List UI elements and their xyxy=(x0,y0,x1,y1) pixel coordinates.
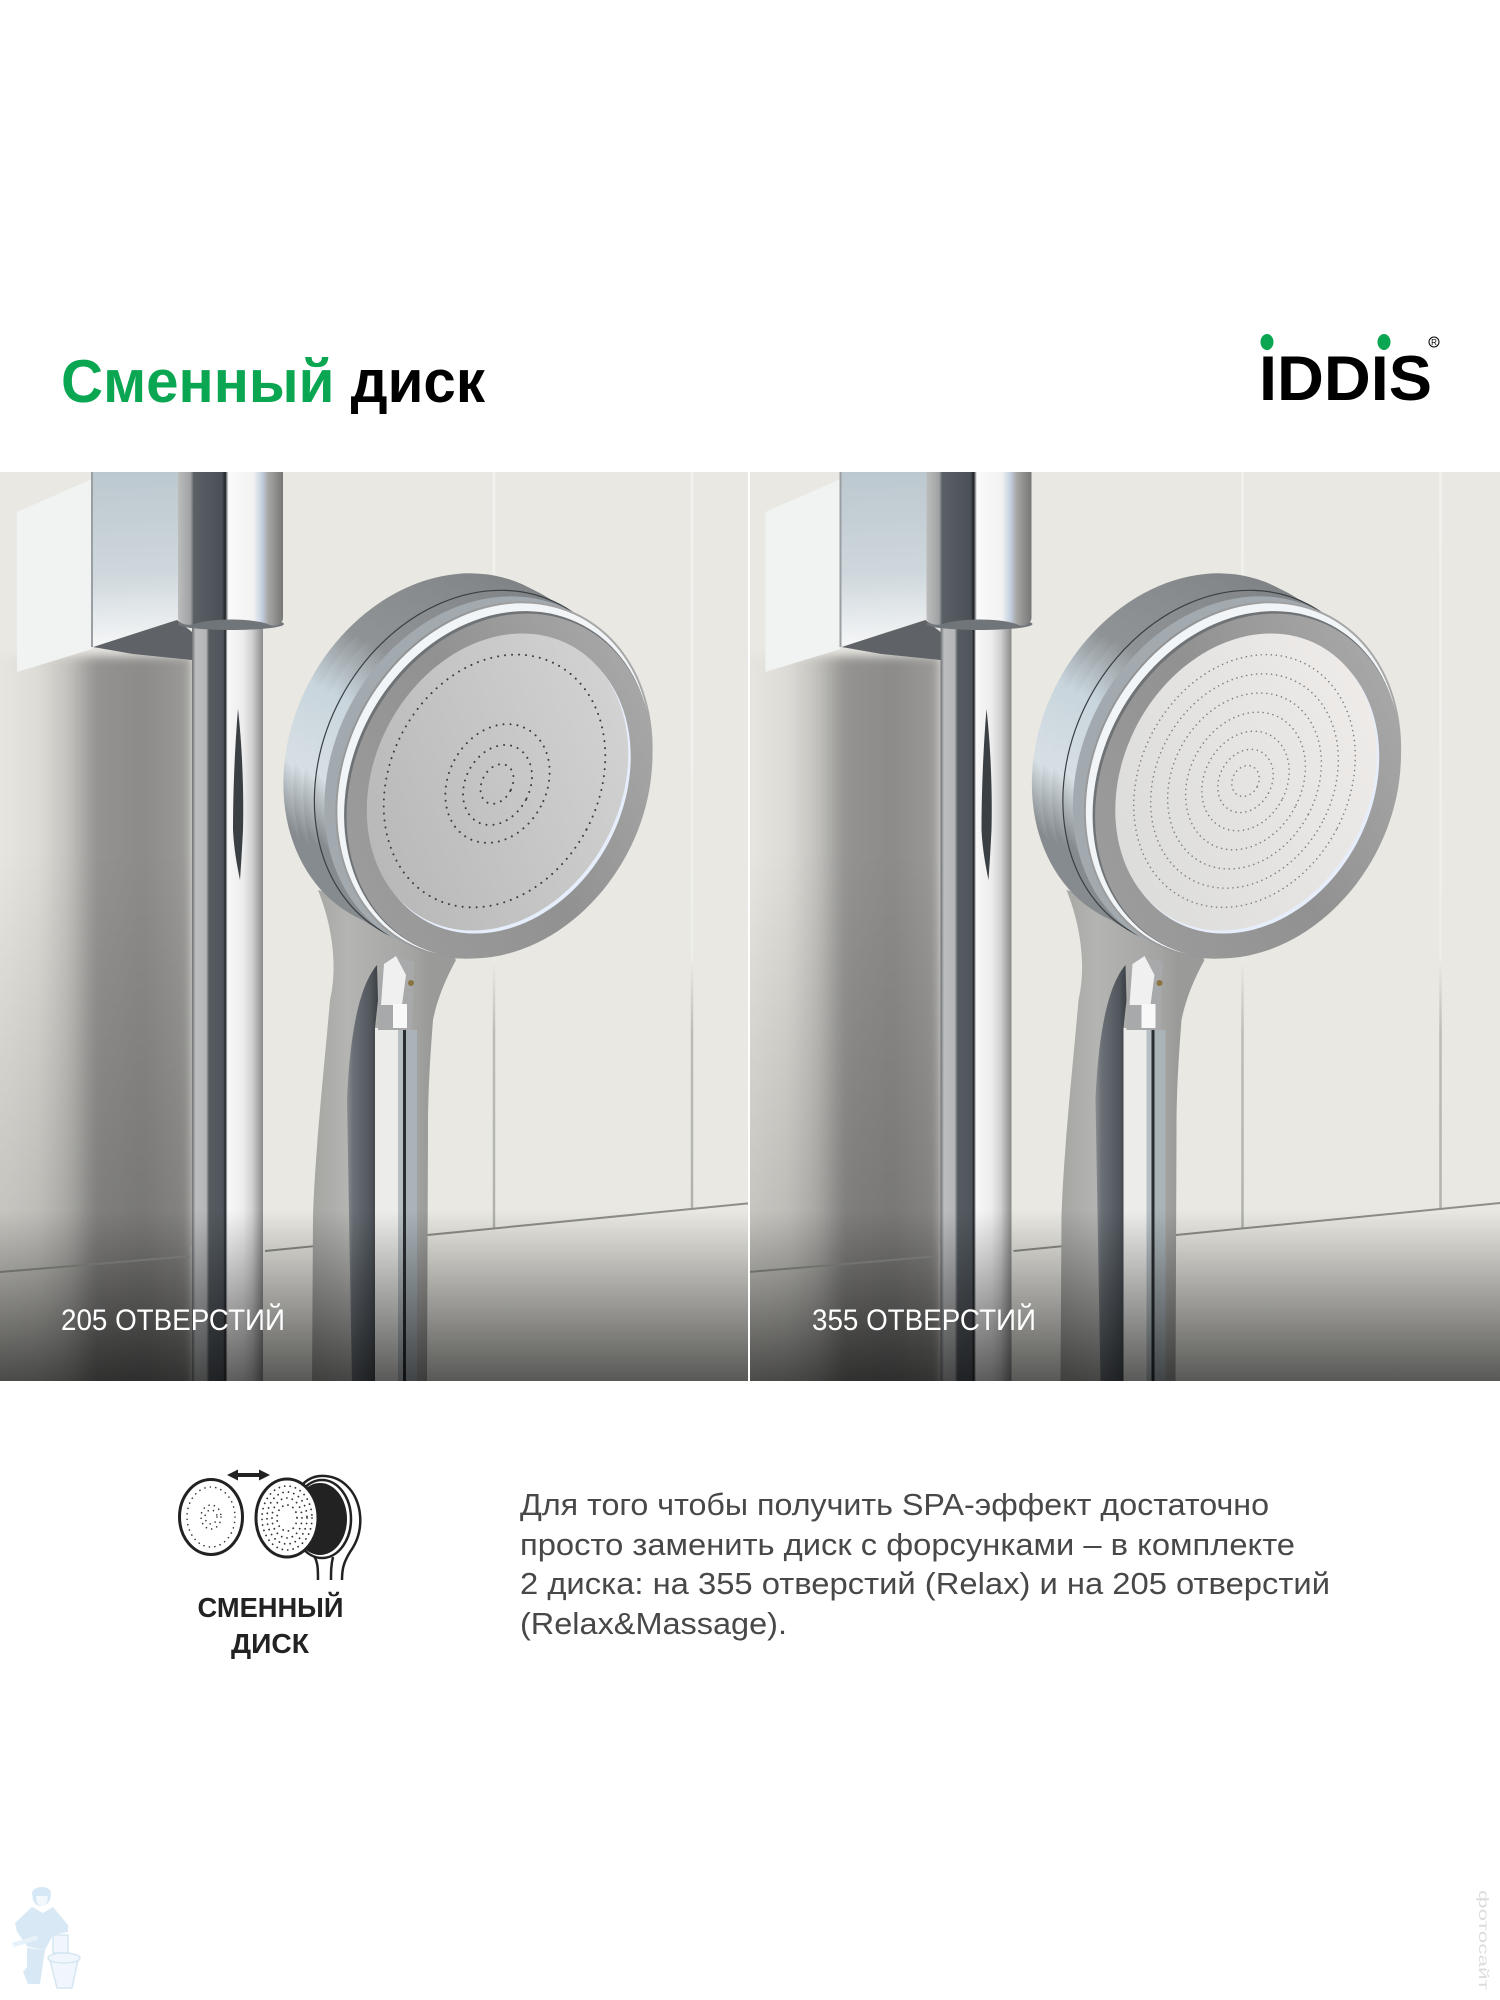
icon caption: СМЕННЫЙ xyxy=(198,1591,344,1623)
shower disc with 205 holes xyxy=(366,634,631,934)
description text: Для того чтобы получить SPA-эффект достаточно xyxy=(520,1487,1269,1522)
watermark: vertical site text: фотосайт xyxy=(1476,1890,1492,1991)
logo: IDDIS: R xyxy=(1431,338,1437,347)
icon: double arrow xyxy=(227,1470,270,1480)
label: 355 holes: 355 ОТВЕРСТИЙ xyxy=(812,1303,1036,1337)
logo: IDDIS: IDDIS xyxy=(1259,344,1432,414)
title: Сменный диск xyxy=(61,348,486,415)
icon: left disc xyxy=(180,1480,242,1554)
icon: right disc xyxy=(256,1479,318,1557)
description text: просто заменить диск с форсунками – в комплекте xyxy=(520,1527,1295,1562)
panel: 355 holes photo xyxy=(718,472,1500,1416)
panel: 205 holes photo xyxy=(0,472,752,1416)
icon: replaceable disc xyxy=(180,1470,360,1659)
icon: replaceable disc: ДИСК xyxy=(231,1628,310,1659)
icon: shower head body xyxy=(293,1476,360,1580)
watermark: plumber mascot xyxy=(12,1887,80,1988)
description text xyxy=(520,1487,1330,1641)
description text: 2 диска: на 355 отверстий (Relax) и на 205 отверстий xyxy=(520,1566,1330,1601)
description text: (Relax&Massage). xyxy=(520,1606,787,1641)
label: 205 holes: 205 ОТВЕРСТИЙ xyxy=(61,1303,285,1337)
shower disc with 355 holes xyxy=(1115,634,1380,934)
